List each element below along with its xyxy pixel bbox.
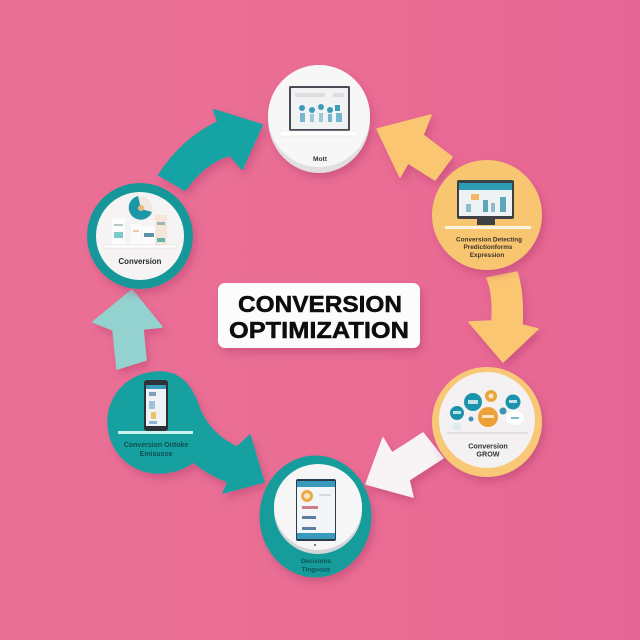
node: top white: [268, 65, 370, 173]
label: Tinguous: [302, 566, 331, 574]
node: lower right chat: [432, 367, 542, 477]
label: Emisusse: [140, 451, 172, 458]
icon: pie chart: [128, 196, 152, 220]
label: GROW: [476, 450, 500, 458]
node: right yellow: [432, 160, 542, 270]
node: conversion (left, teal ring): [87, 183, 193, 289]
tablet dot: [314, 544, 316, 546]
arrow: yellow curved arrow down right: [469, 272, 538, 362]
title: [218, 283, 420, 348]
arrow: light teal up arrow: [93, 290, 162, 369]
label: Conversion: [468, 442, 508, 450]
label: Decisions: [301, 558, 332, 565]
node: lower left teal with arrow tail: [108, 372, 264, 493]
label: Mott: [313, 156, 328, 163]
arrow: white arrow to bottom node: [366, 433, 443, 497]
label: Conversion Detecting: [456, 236, 522, 244]
icon: tablet: [296, 479, 336, 541]
shelf: [104, 245, 176, 248]
shelf: [118, 431, 193, 434]
icon: smartphone: [144, 380, 168, 431]
shelf: [445, 226, 531, 229]
title: CONVERSION: [238, 291, 402, 317]
arrow: yellow arrow to top node: [377, 115, 452, 180]
arrow: teal curved arrow to top node: [159, 110, 262, 190]
label: Predictionforms: [463, 244, 513, 251]
icon: monitor: [457, 180, 514, 225]
label: Expression: [470, 252, 504, 259]
icon: chat bubbles: [450, 390, 524, 430]
label: Conversion Ontoke: [124, 442, 188, 449]
title: OPTIMIZATION: [229, 317, 409, 343]
icon: laptop: [289, 86, 350, 131]
shelf: [447, 432, 528, 434]
node: bottom teal: [260, 456, 372, 578]
shelf: [280, 131, 358, 136]
icon: document cards: [112, 215, 167, 246]
label: Conversion: [119, 257, 162, 266]
